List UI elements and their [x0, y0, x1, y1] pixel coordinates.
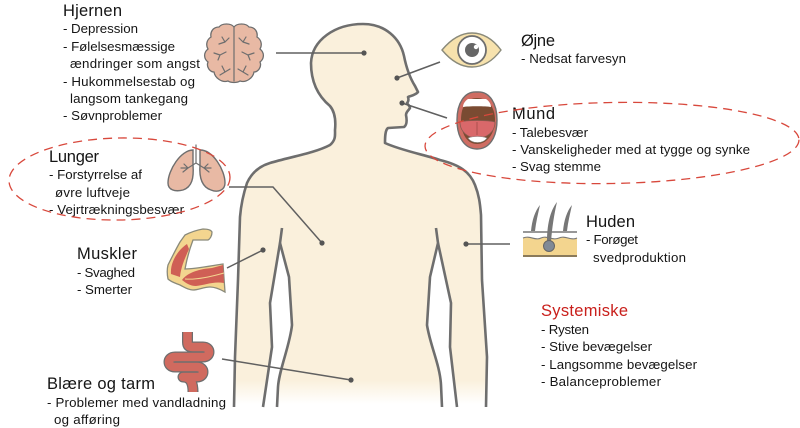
text: Systemiske — [541, 302, 698, 389]
text: Systemiske: - Rysten — [541, 322, 589, 337]
text: Muskler: Muskler — [77, 245, 138, 263]
text: Hjernen — [63, 2, 200, 123]
text: Mund: - Svag stemme — [512, 159, 601, 174]
text: Lunger: Lunger — [49, 148, 100, 166]
connector: brain — [276, 50, 367, 56]
text: Lunger: - Vejrtrækningsbesvær — [49, 202, 185, 217]
text: Mund: - Vanskeligheder med at tygge og synke — [512, 142, 750, 157]
text: Muskler — [77, 245, 138, 297]
connector: eye — [394, 62, 440, 81]
text: Hjernen: ændringer som angst — [70, 56, 200, 71]
text: Systemiske: - Balanceproblemer — [541, 374, 662, 389]
text: Hjernen: - Depression — [63, 21, 138, 36]
text: Øjne — [521, 32, 626, 66]
callout: dashed ellipse around Mund — [424, 99, 800, 187]
text: Lunger: øvre luftveje — [55, 185, 130, 200]
text: Lunger: - Forstyrrelse af — [49, 167, 142, 182]
text: Øjne: - Nedsat farvesyn — [521, 51, 626, 66]
text: Hjernen: Hjernen — [63, 2, 122, 20]
text: Muskler: - Smerter — [77, 282, 133, 297]
icon: brain — [205, 24, 263, 82]
connector: skin — [463, 241, 510, 247]
text: Hjernen: - Følelsesmæssige — [63, 39, 175, 54]
callout: dashed ellipse around Lunger — [8, 136, 231, 222]
text: Mund: Mund — [512, 105, 555, 123]
text: Hjernen: - Søvnproblemer — [63, 108, 163, 123]
icon: skin with hair — [523, 202, 577, 256]
text: Øjne: Øjne — [521, 32, 555, 50]
text: Huden: - Forøget — [586, 232, 638, 247]
text: Lunger — [49, 148, 185, 217]
icon: eye — [442, 33, 501, 67]
icon: intestine — [169, 332, 209, 392]
text: Huden: Huden — [586, 213, 635, 231]
text: Blære og tarm: og afføring — [54, 412, 120, 427]
connector: bladder and bowel — [222, 359, 354, 383]
icon: mouth — [457, 92, 497, 149]
connector: muscles — [227, 247, 266, 268]
text: Blære og tarm: - Problemer med vandladning — [47, 395, 226, 410]
icon: flexed arm muscle — [167, 229, 225, 292]
text: Systemiske: - Langsomme bevægelser — [541, 357, 698, 372]
text: Hjernen: - Hukommelsestab og — [63, 74, 195, 89]
text: Systemiske: - Stive bevægelser — [541, 339, 653, 354]
human body silhouette — [234, 24, 487, 407]
connector: mouth — [399, 100, 447, 118]
text: Systemiske: Systemiske — [541, 302, 628, 320]
text: Huden: svedproduktion — [593, 250, 686, 265]
text: Mund — [512, 105, 750, 174]
connector: lungs — [229, 187, 325, 246]
icon: lungs — [168, 145, 225, 191]
text: Hjernen: langsom tankegang — [70, 91, 188, 106]
text: Muskler: - Svaghed — [77, 265, 135, 280]
text: Blære og tarm: Blære og tarm — [47, 375, 155, 393]
text: Blære og tarm — [47, 375, 226, 427]
text: Huden — [586, 213, 686, 265]
text: Mund: - Talebesvær — [512, 125, 589, 140]
